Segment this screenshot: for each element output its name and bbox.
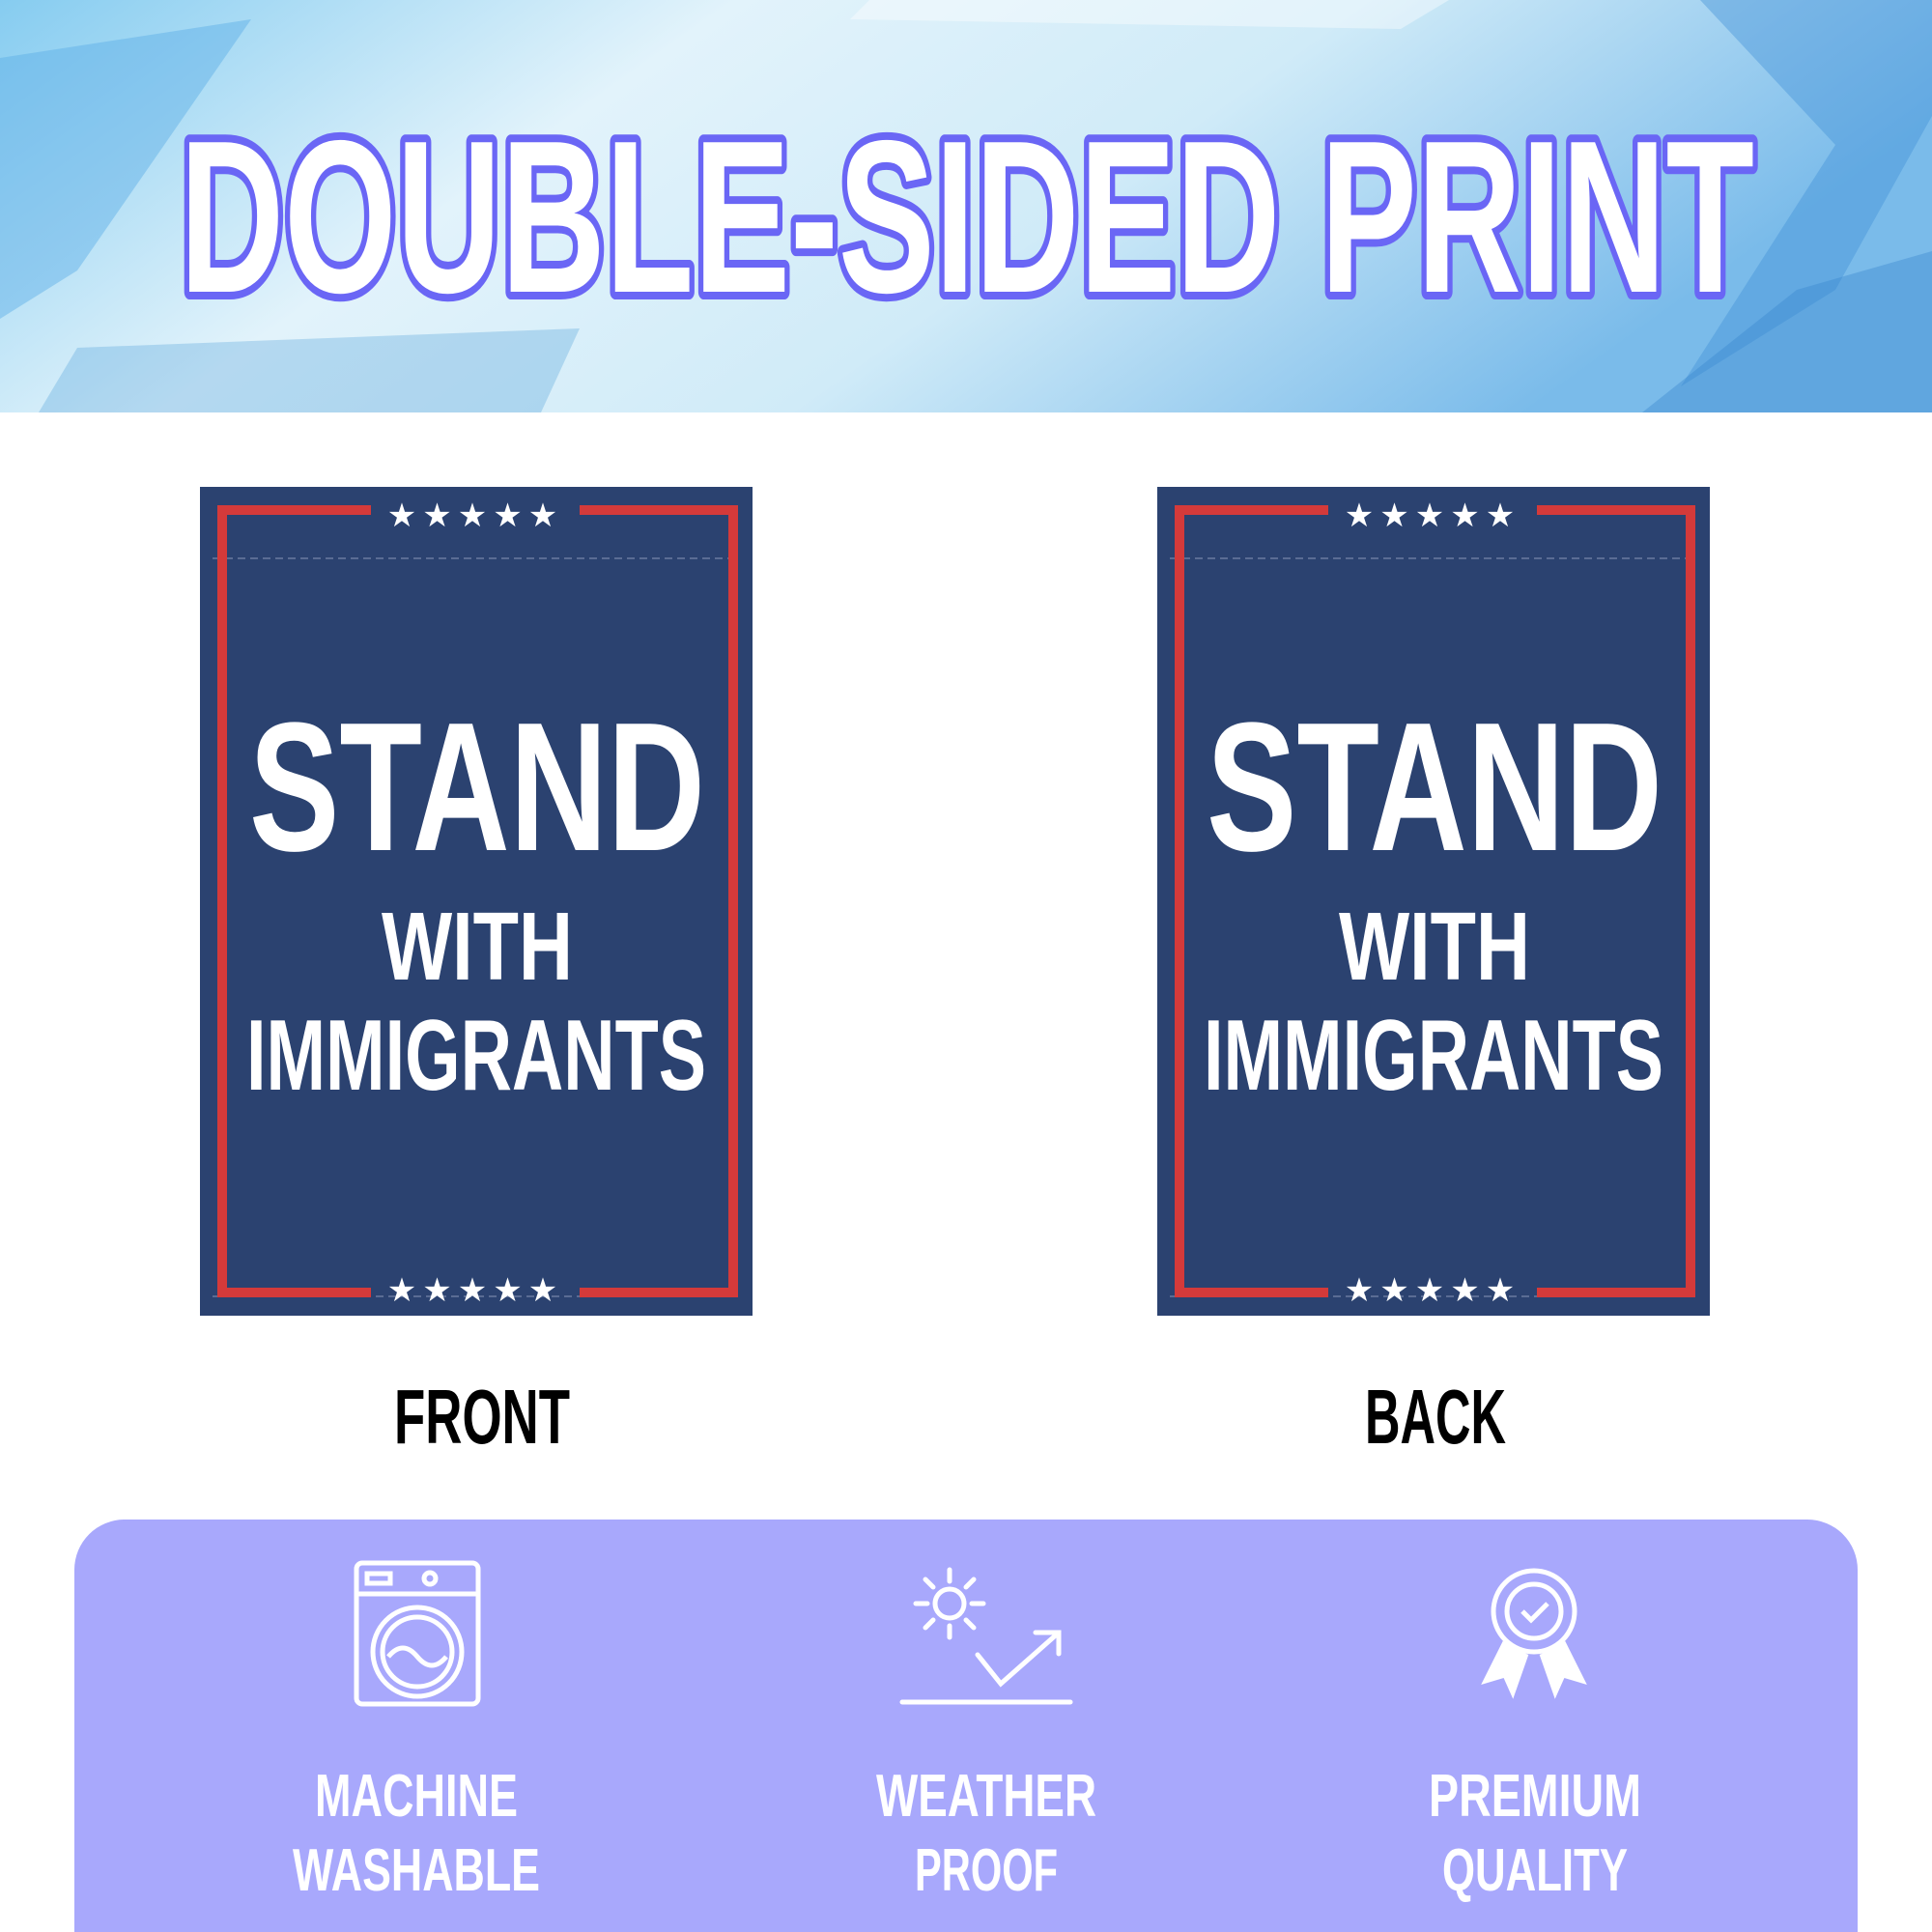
- flag: front: [200, 487, 753, 1316]
- text: machine washable: [293, 1763, 540, 1904]
- flag: back: STAND: [1207, 685, 1662, 890]
- flag: back: ★★★★★: [1345, 497, 1520, 535]
- flag: back: ★★★★★: [1345, 1271, 1520, 1310]
- text: premium quality: PREMIUM: [1429, 1763, 1641, 1830]
- text: premium quality: QUALITY: [1442, 1837, 1628, 1904]
- flag: front: IMMIGRANTS: [246, 1000, 706, 1112]
- label: front: FRONT: [394, 1374, 570, 1460]
- label: back: BACK: [1365, 1374, 1506, 1460]
- header banner: [0, 0, 1932, 412]
- flag: back: [1157, 487, 1710, 1316]
- text: weather proof: [876, 1763, 1096, 1904]
- flag: back: WITH: [1339, 893, 1530, 1001]
- text: machine washable: MACHINE: [315, 1763, 518, 1830]
- text: machine washable: WASHABLE: [293, 1837, 540, 1904]
- flag: back: IMMIGRANTS: [1204, 1000, 1663, 1112]
- panel: features: [74, 1520, 1858, 1932]
- icon: weather: [902, 1570, 1070, 1702]
- flag: front: ★★★★★: [387, 1271, 563, 1310]
- flag: front: ★★★★★: [387, 497, 563, 535]
- icon: washing machine: [356, 1563, 478, 1704]
- flag: front: WITH: [382, 893, 573, 1001]
- text: premium quality: [1429, 1763, 1641, 1904]
- icon: quality badge: [1486, 1571, 1582, 1692]
- text: weather proof: WEATHER: [876, 1763, 1096, 1830]
- flag: front: STAND: [249, 685, 705, 890]
- text: weather proof: PROOF: [915, 1837, 1058, 1904]
